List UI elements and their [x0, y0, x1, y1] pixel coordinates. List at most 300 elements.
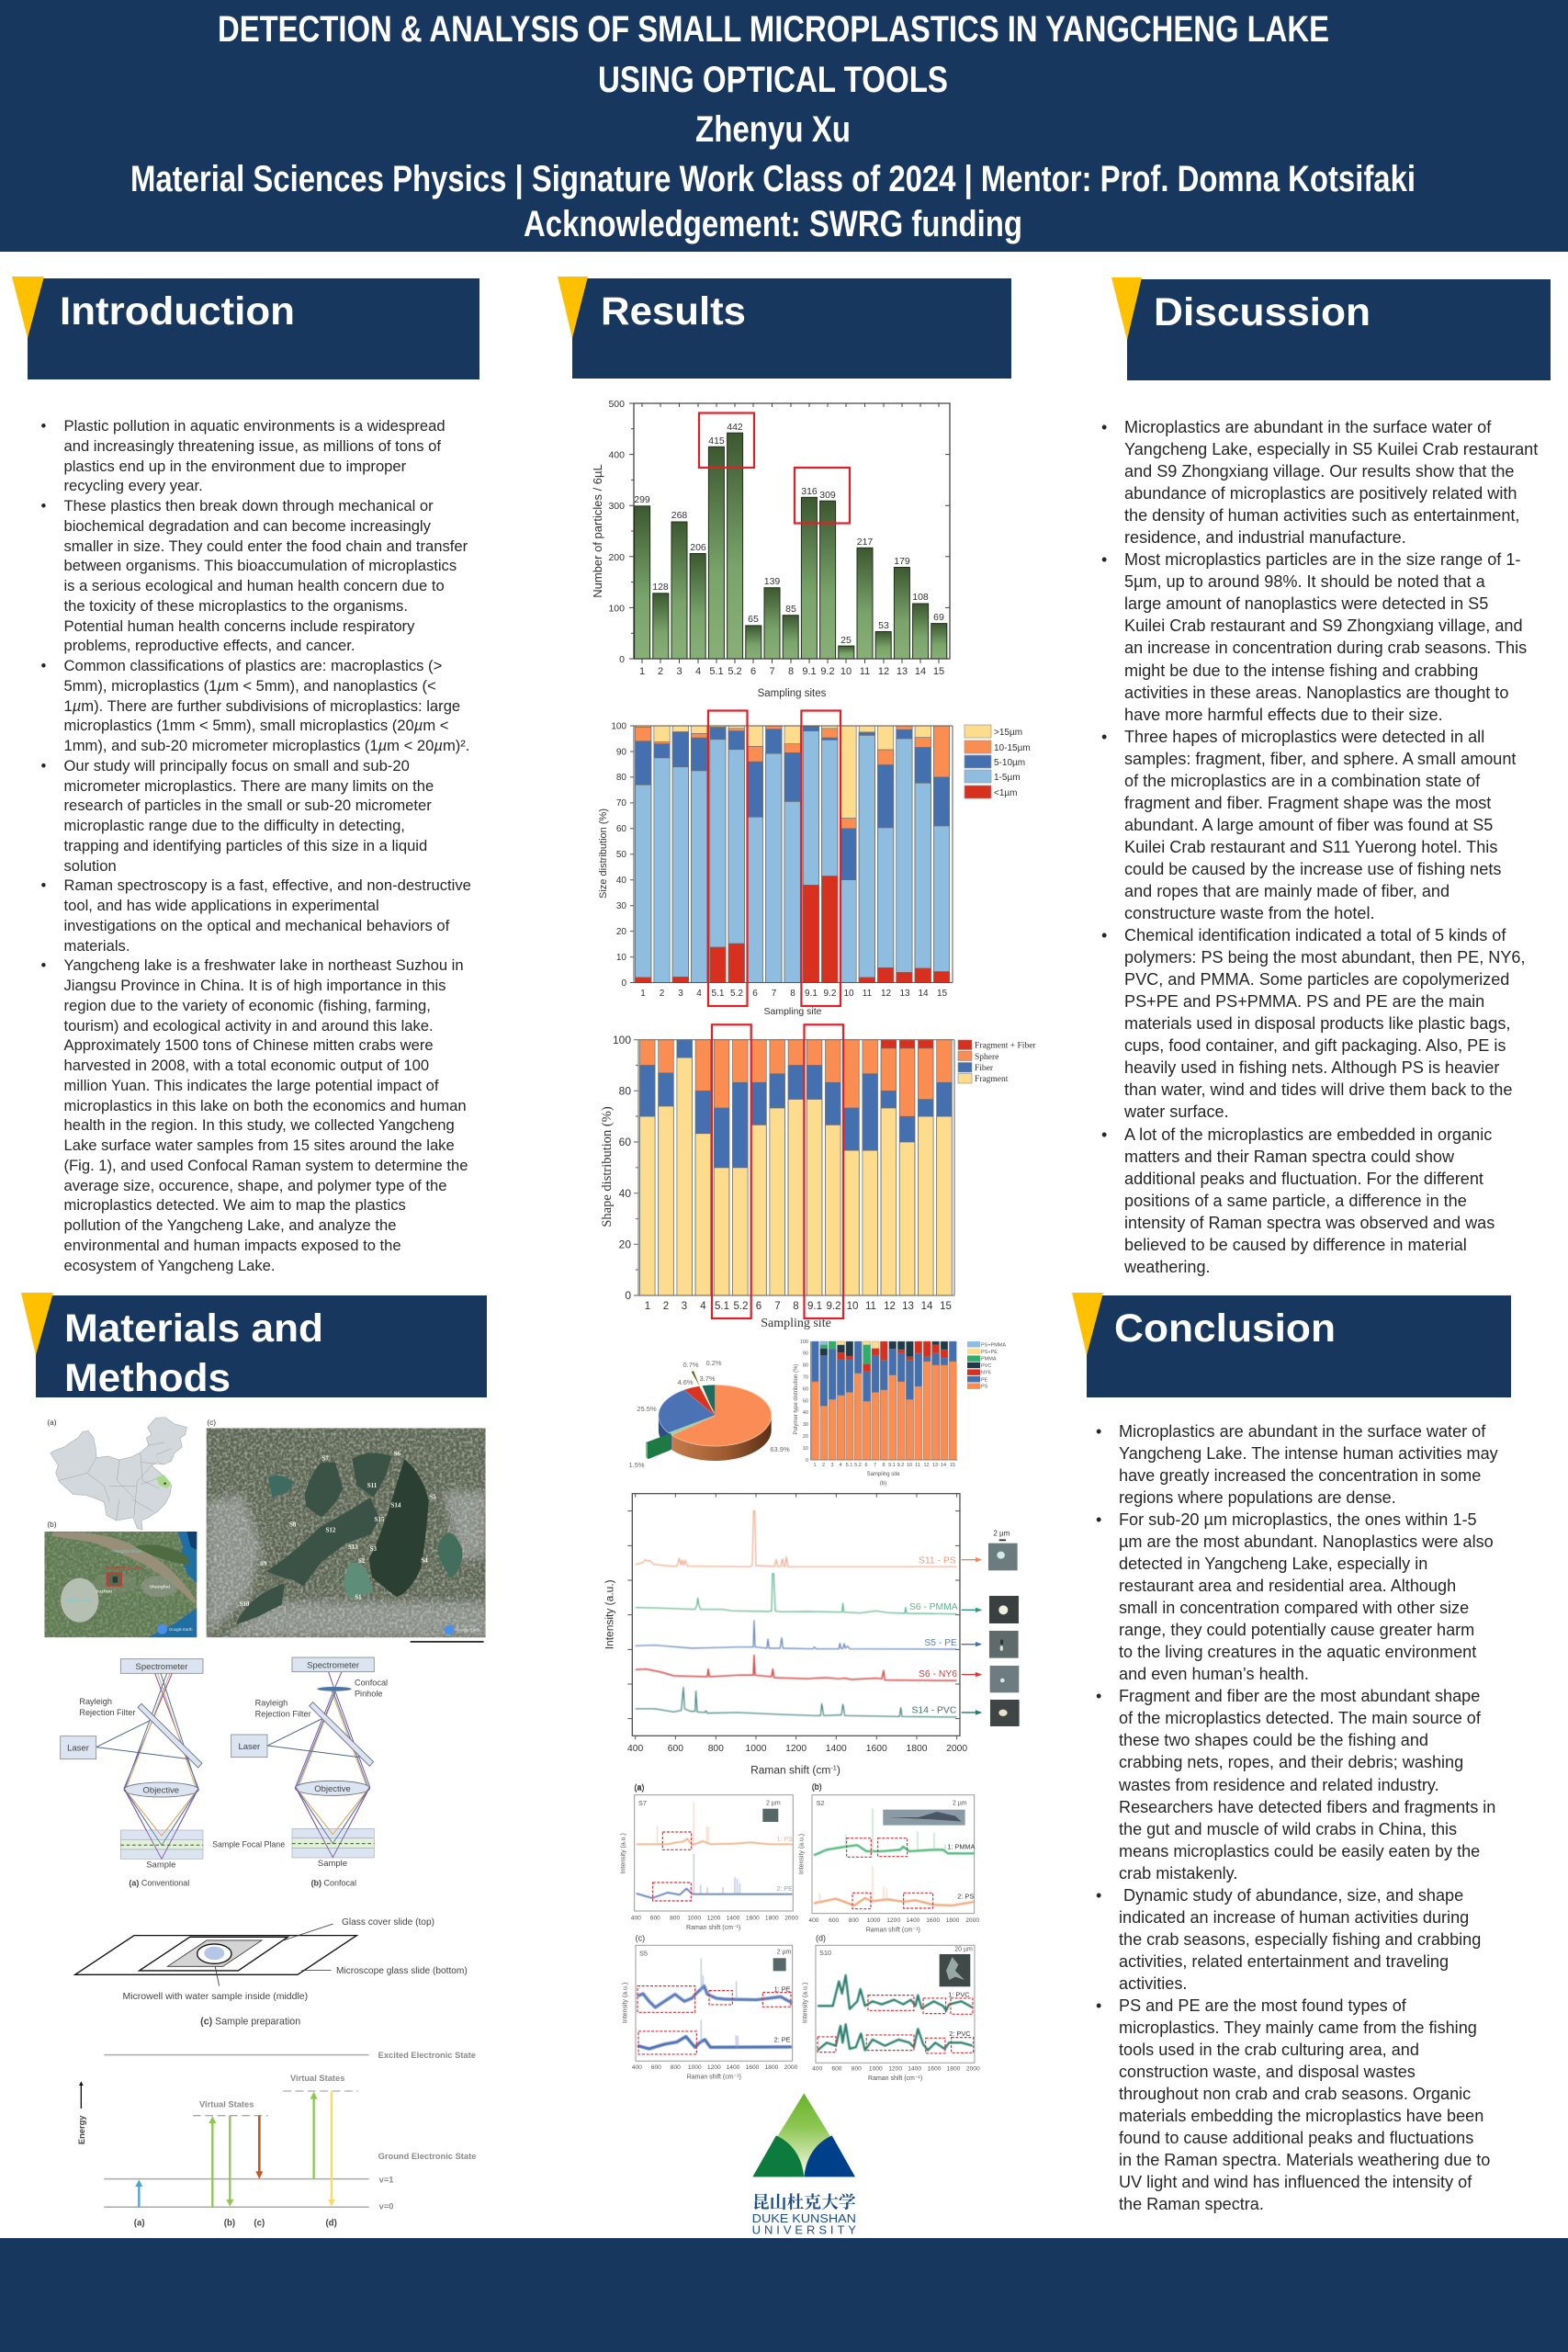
line chart: Raman spectra of polymers: Raman shift (cm	[750, 1764, 830, 1777]
stacked bar chart: size distribution: 50	[616, 850, 626, 860]
stacked bar chart: polymer type distribution: 50	[803, 1398, 808, 1404]
panel b: S2: 2: PS	[957, 1893, 974, 1901]
stacked bar chart: shape distribution: 40	[619, 1187, 631, 1200]
footer band	[0, 2238, 1568, 2352]
setup a: conventional	[61, 1659, 203, 1888]
text: introduction: region due to the variety of economic (fishing, farming,	[64, 997, 431, 1014]
map c: Yangcheng Lake sampling sites: Google Earth	[457, 1627, 480, 1632]
bar chart: number of particles per site: 217	[857, 537, 873, 548]
stacked bar chart: shape distribution: 15	[940, 1301, 952, 1312]
label: map b: (b)	[47, 1520, 57, 1529]
spectra panels a to d: 1800	[765, 1915, 779, 1921]
stacked bar chart: size distribution: 5.2	[730, 989, 743, 999]
stacked bar chart: polymer type distribution: 20	[803, 1434, 808, 1440]
legend: polymer types: PS+PE	[981, 1350, 998, 1355]
bar chart: number of particles per site: 200	[608, 552, 625, 563]
spectra panels a to d: 400	[632, 2064, 642, 2071]
map c: Yangcheng Lake sampling sites: S15	[375, 1516, 385, 1523]
setup a: conventional: Rayleigh	[79, 1697, 112, 1706]
text: discussion: heavily used in fishing nets. Although PS is heavier	[1124, 1058, 1499, 1077]
bar chart: number of particles per site: 69	[933, 612, 944, 623]
text: conclusion: Fragment and fiber are the most abundant shape	[1119, 1687, 1480, 1705]
heading: Results: Results	[601, 289, 746, 334]
spectra panels a to d: Intensity (a.u.)	[798, 1834, 805, 1874]
text: discussion: an increase in concentration during crab seasons. This	[1124, 639, 1527, 657]
legend: polymer types: PS	[981, 1385, 988, 1390]
bar chart: number of particles per site: 400	[608, 450, 625, 461]
text: conclusion: the crab seasons, especially fishing and crabbing	[1119, 1930, 1481, 1949]
pie chart: polymer share: 1.5%	[628, 1461, 645, 1469]
panel a: S7: 1: PS	[777, 1837, 793, 1843]
text: conclusion: activities, related entertainment and traveling	[1119, 1952, 1449, 1971]
spectra panels a to d: 1000	[869, 2066, 883, 2073]
text: introduction: microplastics detected. We aim to map the plastics	[64, 1196, 406, 1214]
text: discussion: positions of a same particle, a difference in the	[1124, 1192, 1467, 1210]
spectra panels a to d: 800	[671, 2064, 681, 2071]
line chart: Raman spectra of polymers: S6 - NY6	[919, 1669, 957, 1679]
text: discussion: constructure waste from the hotel.	[1124, 904, 1375, 922]
text: introduction: is a serious ecological and human health concern due to	[64, 577, 445, 594]
figure: location maps	[44, 1418, 487, 1642]
stacked bar chart: polymer type distribution: 100	[800, 1340, 808, 1345]
stacked bar chart: shape distribution: 7	[774, 1301, 781, 1312]
diagram: Raman energy levels: v=1	[379, 2176, 393, 2185]
text: introduction: problems, reproductive effects, and cancer.	[64, 637, 355, 654]
map c: Yangcheng Lake sampling sites: S12	[326, 1526, 336, 1533]
text: conclusion: to the living creatures in the aquatic environment	[1119, 1643, 1476, 1661]
bar chart: number of particles per site: 500	[608, 399, 625, 410]
spectra panels a to d: Raman shift (cm⁻¹)	[687, 2074, 741, 2080]
map c: Yangcheng Lake sampling sites: S5	[429, 1493, 436, 1500]
pie chart: polymer share: 0.2%	[705, 1359, 722, 1367]
stacked bar chart: size distribution: 6	[752, 989, 758, 999]
line chart: Raman spectra of polymers: S11 - PS	[919, 1555, 956, 1566]
setup a: conventional: Rejection Filter	[79, 1708, 135, 1717]
stacked bar chart: shape distribution: 5.1	[715, 1301, 729, 1312]
stacked bar chart: polymer type distribution: 4	[839, 1463, 842, 1468]
setup a: conventional: Sample	[146, 1860, 175, 1871]
map c: Yangcheng Lake sampling sites: S10	[240, 1600, 250, 1608]
text: discussion: Three hapes of microplastics were detected in all	[1124, 728, 1484, 746]
map c: Yangcheng Lake sampling sites: S1	[355, 1593, 362, 1600]
legend: size classes	[964, 725, 1031, 798]
arrow: energy axis: Energy	[77, 2115, 86, 2144]
bar chart: number of particles per site: 0	[619, 654, 625, 665]
legend: polymer types: PS+PMMA	[981, 1343, 1006, 1349]
spectra panels a to d: 1000	[867, 1917, 881, 1924]
bar chart: number of particles per site: 9.1	[802, 666, 817, 677]
legend: size classes: 1-5µm	[994, 773, 1021, 783]
text: conclusion: wastes from residence and related industry.	[1119, 1775, 1439, 1793]
panel d: S10: S10	[819, 1949, 831, 1957]
text: conclusion: indicated an increase of human activities during	[1119, 1908, 1469, 1927]
stacked bar chart: shape distribution: 2	[663, 1301, 669, 1312]
text: conclusion: activities.	[1119, 1974, 1187, 1993]
text: conclusion: and even human’s health.	[1119, 1665, 1309, 1683]
spectra panels a to d: (d)	[816, 1934, 826, 1943]
setup b: confocal: Pinhole	[355, 1689, 383, 1698]
diagram: sample preparation slide: Microwell with water sample inside (middle)	[123, 1992, 308, 2002]
arrow: energy axis	[77, 2081, 86, 2144]
text: conclusion: tools used in the crab culturing area, and	[1119, 2041, 1419, 2059]
text: discussion: intensity of Raman spectra was observed and was	[1124, 1214, 1495, 1232]
stacked bar chart: size distribution: 30	[616, 901, 626, 911]
map b: Yangtze delta satellite view: Yangcheng Lake	[106, 1566, 142, 1571]
heading: Materials and Methods: Methods	[64, 1356, 231, 1400]
map b: Yangtze delta satellite view: Yangtze River	[113, 1549, 142, 1555]
bar chart: number of particles per site: 1	[639, 666, 645, 677]
text: introduction: microplastics in this lake on both the economics and human	[64, 1097, 467, 1114]
stacked bar chart: shape distribution: 4	[700, 1301, 706, 1312]
bar chart: number of particles per site: 5.1	[709, 666, 724, 677]
panel a: S7: 2: PE	[777, 1886, 793, 1893]
stacked bar chart: size distribution: Sampling site	[763, 1006, 822, 1017]
spectra panels a to d: Intensity (a.u.)	[802, 1983, 808, 2023]
setup b: confocal	[231, 1657, 388, 1888]
setup b: confocal: Confocal	[355, 1678, 388, 1687]
diagram: Raman energy levels: (c)	[254, 2218, 265, 2228]
bar chart: number of particles per site: 179	[894, 556, 910, 567]
text: introduction: microplastic range due to the difficulty in detecting,	[64, 817, 405, 834]
diagram: Raman energy levels: v=0	[379, 2202, 393, 2211]
heading: Discussion: Discussion	[1154, 290, 1371, 334]
line chart: Raman spectra of polymers: 2000	[946, 1744, 967, 1754]
stacked bar chart: shape distribution: 3	[682, 1301, 687, 1312]
panel d: S10: 2: PVC	[949, 2030, 971, 2038]
text: introduction: materials.	[64, 937, 130, 954]
bar chart: number of particles per site: 14	[915, 666, 926, 677]
bar chart: number of particles per site: 8	[788, 666, 794, 677]
diagram: sample preparation slide: Glass cover slide (top)	[342, 1917, 434, 1928]
stacked bar chart: shape distribution: 20	[619, 1238, 631, 1251]
particle micrographs: 2 µm	[993, 1530, 1010, 1538]
map c: Yangcheng Lake sampling sites: S13	[348, 1544, 358, 1551]
heading: Results	[558, 277, 1011, 379]
text: conclusion: in the Raman spectra. Materials weathering due to	[1119, 2151, 1490, 2169]
stacked bar chart: polymer type distribution: 80	[803, 1363, 808, 1369]
stacked bar chart: size distribution: 8	[790, 989, 795, 999]
map b: Yangtze delta satellite view: Shanghai	[150, 1585, 171, 1590]
text: discussion: Kuilei Crab restaurant and S9 Zhongxiang village, and	[1124, 616, 1523, 635]
text: discussion: weathering.	[1124, 1258, 1211, 1276]
spectra panels a to d: 1800	[946, 1917, 960, 1924]
text: discussion: PS+PE and PS+PMMA. PS and PE are the main	[1124, 992, 1484, 1011]
text: conclusion: construction waste, and disposal wastes	[1119, 2063, 1416, 2081]
text: conclusion: throughout non crab and crab seasons. Organic	[1119, 2085, 1471, 2103]
label: sample focal plane: Sample Focal Plane	[212, 1839, 285, 1849]
logo: Duke Kunshan University: DUKE KUNSHAN	[752, 2211, 856, 2225]
text: discussion: additional peaks and fluctuation. For the different	[1124, 1170, 1483, 1188]
particle micrographs	[988, 1530, 1020, 1726]
spectra panels a to d: 1600	[746, 1915, 760, 1921]
panel c: S5: 1: PE	[774, 1984, 791, 1993]
map c: Yangcheng Lake sampling sites: S9	[260, 1560, 267, 1567]
panel c: S5: 2: PE	[774, 2036, 791, 2044]
stacked bar chart: size distribution: 1	[640, 989, 646, 999]
text: introduction: Yangcheng lake is a freshwater lake in northeast Suzhou in	[64, 956, 464, 974]
heading: Conclusion: Conclusion	[1114, 1306, 1336, 1351]
stacked bar chart: size distribution: 80	[616, 773, 626, 783]
line chart: Raman spectra of polymers: 1200	[785, 1744, 807, 1754]
stacked bar chart: size distribution: 3	[678, 989, 683, 999]
text: conclusion: means microplastics could be easily eaten by the	[1119, 1842, 1480, 1860]
setup a: conventional: Laser	[67, 1744, 89, 1754]
text: introduction: tool, and has wide applications in experimental	[64, 897, 379, 914]
spectra panels a to d: 1600	[926, 1917, 940, 1924]
stacked bar chart: size distribution: 13	[899, 989, 910, 999]
legend: polymer types	[967, 1341, 1006, 1390]
spectra panels a to d: 2000	[784, 1915, 798, 1921]
bar chart: number of particles per site: 10	[840, 666, 852, 677]
logo: Duke Kunshan University: 昆山杜克大学	[752, 2189, 856, 2213]
panel b: S2: 2 µm	[953, 1801, 967, 1807]
bar chart: number of particles per site: 12	[878, 666, 889, 677]
panel c: S5	[636, 1945, 793, 2061]
bar chart: number of particles per site	[591, 399, 950, 699]
text: conclusion	[1097, 1422, 1498, 2213]
text: introduction: between organisms. This bioaccumulation of microplastics	[64, 557, 457, 574]
text: discussion: Yangcheng Lake, especially in S5 Kuilei Crab restaurant	[1124, 440, 1538, 458]
text: discussion: water surface.	[1124, 1102, 1229, 1121]
stacked bar chart: polymer type distribution: Polymer type distribution (%)	[794, 1364, 799, 1434]
text: introduction: environmental and human impacts exposed to the	[64, 1237, 401, 1254]
stacked bar chart: size distribution: 60	[616, 824, 626, 834]
text: conclusion: materials embedding the microplastics have been	[1119, 2107, 1483, 2125]
stacked bar chart: polymer type distribution: 70	[803, 1374, 808, 1380]
bar chart: number of particles per site: 11	[860, 666, 870, 677]
text: conclusion: have greatly increased the concentration in some	[1119, 1466, 1481, 1485]
stacked bar chart: polymer type distribution: (b)	[880, 1481, 886, 1487]
line chart: Raman spectra of polymers: Intensity (a.u.)	[604, 1579, 616, 1649]
text: conclusion: restaurant area and residential area. Although	[1119, 1577, 1456, 1595]
bar chart: number of particles per site: 65	[748, 614, 759, 625]
text: discussion: of the microplastics are in a combination state of	[1124, 772, 1480, 790]
stacked bar chart: size distribution: 40	[616, 876, 626, 886]
spectra panels a to d: 600	[651, 2064, 661, 2071]
line chart: Raman spectra of polymers	[604, 1494, 1020, 1792]
spectra panels a to d: 1200	[886, 1917, 900, 1924]
spectra panels a to d: 1200	[888, 2066, 902, 2073]
diagram: Raman energy levels: (d)	[325, 2218, 337, 2228]
stacked bar chart: shape distribution: 13	[902, 1301, 914, 1312]
map a: China	[47, 1418, 186, 1530]
map c: Yangcheng Lake sampling sites: S4	[421, 1556, 428, 1564]
text: discussion: have more harmful effects due to their size.	[1124, 706, 1443, 724]
bar chart: number of particles per site: Sampling sites	[758, 688, 827, 699]
spectra panels a to d: Intensity (a.u.)	[622, 1983, 628, 2023]
bar chart: number of particles per site: 206	[690, 542, 706, 553]
text: conclusion: PS and PE are the most found types of	[1119, 1996, 1406, 2015]
diagram: sample preparation slide	[75, 1917, 468, 2002]
stacked bar chart: shape distribution: 1	[645, 1301, 650, 1312]
text: discussion: A lot of the microplastics are embedded in organic	[1124, 1125, 1492, 1143]
text: discussion: large amount of nanoplastics were detected in S5	[1124, 594, 1488, 613]
stacked bar chart: polymer type distribution: 13	[932, 1463, 938, 1468]
panel b: S2: 1: PMMA	[947, 1843, 976, 1851]
map c: Yangcheng Lake sampling sites: S11	[367, 1482, 378, 1489]
text: introduction: plastics end up in the environment due to improper	[64, 458, 406, 474]
stacked bar chart: polymer type distribution: 0	[806, 1458, 808, 1464]
line chart: Raman spectra of polymers: 1600	[866, 1744, 887, 1754]
setup b: confocal: Rejection Filter	[255, 1710, 311, 1719]
pie chart: polymer share: 25.5%	[637, 1405, 657, 1413]
panel c: S5: 2 µm	[777, 1950, 791, 1956]
map b: Yangtze delta satellite view: Google Earth	[169, 1627, 193, 1632]
text: discussion: believed to be caused by difference in material	[1124, 1236, 1467, 1254]
heading: Discussion	[1111, 277, 1551, 380]
author: Zhenyu Xu	[695, 109, 851, 150]
stacked bar chart: size distribution: 20	[616, 927, 626, 937]
spectra panels a to d: 1400	[907, 1917, 920, 1924]
line chart: Raman spectra of polymers: S6 - PMMA	[909, 1602, 958, 1612]
map c: Yangcheng Lake sampling sites: S7	[322, 1455, 329, 1463]
stacked bar chart: shape distribution: 14	[921, 1301, 933, 1312]
text: conclusion: of the microplastics detected. The main source of	[1119, 1709, 1481, 1727]
text: discussion: Microplastics are abundant in the surface water of	[1124, 418, 1491, 436]
text: introduction: biochemical degradation and can become increasingly	[64, 517, 431, 535]
spectra panels a to d: 1200	[707, 2064, 721, 2071]
text: introduction: million Yuan. This indicates the large potential impact of	[64, 1077, 439, 1094]
text: introduction: ecosystem of Yangcheng Lake.	[64, 1257, 276, 1273]
poster title line 2: USING OPTICAL TOOLS	[598, 60, 948, 100]
map c: Yangcheng Lake sampling sites: S8	[289, 1521, 297, 1528]
spectra panels a to d	[621, 1782, 980, 2082]
text: introduction: 5mm), microplastics (1µm < 5mm), and nanoplastics (<	[64, 677, 436, 695]
text: discussion: Kuilei Crab restaurant and S11 Yuerong hotel. This	[1124, 838, 1497, 856]
stacked bar chart: shape distribution: 11	[865, 1301, 876, 1312]
bar chart: number of particles per site: 268	[671, 510, 687, 521]
text: introduction: Potential human health concerns include respiratory	[64, 617, 414, 634]
bar chart: number of particles per site: 415	[708, 435, 725, 447]
stacked bar chart: polymer type distribution: 7	[874, 1463, 876, 1468]
text: conclusion: Yangcheng Lake. The intense human activities may	[1119, 1444, 1498, 1463]
spectra panels a to d: 800	[670, 1915, 681, 1921]
pie chart: polymer share: 63.9%	[770, 1445, 790, 1453]
stacked bar chart: size distribution: 15	[937, 989, 947, 999]
text: conclusion: the Raman spectra.	[1119, 2195, 1264, 2213]
legend: polymer types: NY6	[981, 1371, 991, 1376]
text: conclusion: microplastics. They mainly came from the fishing	[1119, 2018, 1477, 2037]
diagram: Raman energy levels: Virtual States	[290, 2074, 344, 2083]
arrows: transitions	[135, 2091, 335, 2207]
bar chart: number of particles per site: 25	[840, 635, 852, 646]
text: conclusion: these two shapes could be the fishing and	[1119, 1731, 1428, 1749]
text: conclusion: Researchers have detected fibers and fragments in	[1119, 1798, 1495, 1816]
panel a: S7: S7	[638, 1799, 647, 1807]
text: introduction: Our study will principally focus on small and sub-20	[64, 757, 410, 775]
map c: Yangcheng Lake sampling sites: (c)	[207, 1418, 216, 1427]
panel c: S5: S5	[639, 1950, 648, 1958]
stacked bar chart: size distribution: Size distribution (%)	[598, 808, 609, 899]
bar chart: number of particles per site: 316	[801, 486, 818, 497]
diagram: Raman energy levels: Excited Electronic State	[378, 2051, 476, 2060]
stacked bar chart: size distribution: 2	[660, 989, 665, 999]
spectra panels a to d: Raman shift (cm⁻¹)	[866, 1928, 920, 1934]
legend: size classes: >15µm	[994, 728, 1022, 738]
diagram: Raman energy levels: Virtual States	[199, 2099, 254, 2109]
text: conclusion: Microplastics are abundant in the surface water of	[1119, 1422, 1485, 1441]
line chart: Raman spectra of polymers: )	[837, 1764, 840, 1777]
stacked bar chart: polymer type distribution: Sampling site	[867, 1472, 900, 1477]
text: discussion: could be caused by the increase use of fishing nets	[1124, 860, 1501, 878]
stacked bar chart: shape distribution: 100	[613, 1034, 631, 1046]
text: conclusion: UV light and wind has influenced the intensity of	[1119, 2173, 1472, 2191]
stacked bar chart: polymer type distribution	[794, 1340, 1006, 1487]
stacked bar chart: polymer type distribution: 9.2	[897, 1463, 904, 1468]
text: introduction: investigations on the optical and mechanical behaviors of	[64, 917, 449, 934]
bar chart: number of particles per site: 3	[676, 666, 682, 677]
text: introduction: harvested in 2008, with a total economic output of 100	[64, 1057, 429, 1074]
stacked bar chart: polymer type distribution: 6	[864, 1463, 868, 1468]
text: discussion: Chemical identification indicated a total of 5 kinds of	[1124, 926, 1506, 944]
map c: Yangcheng Lake sampling sites: S14	[391, 1502, 401, 1510]
legend: shapes	[958, 1040, 1036, 1084]
bar chart: number of particles per site: 128	[652, 582, 669, 593]
bar chart: number of particles per site: 2	[658, 666, 663, 677]
heading: Conclusion	[1072, 1293, 1511, 1397]
text: discussion: 5µm, up to around 98%. It should be noted that a	[1124, 572, 1485, 591]
pie chart: polymer share	[628, 1359, 790, 1469]
bar chart: number of particles per site: 5.2	[728, 666, 742, 677]
spectra panels a to d: 1400	[727, 2064, 740, 2071]
diagram: sample preparation slide: Microscope glass slide (bottom)	[336, 1966, 468, 1976]
text: conclusion: µm are the most abundant. Nanoplastics were also	[1119, 1532, 1494, 1551]
spectra panels a to d: Raman shift (cm⁻¹)	[686, 1925, 740, 1931]
arrows to particle micrographs	[962, 1557, 982, 1715]
stacked bar chart: polymer type distribution: 3	[830, 1463, 834, 1468]
setup a: conventional: (a) Conventional	[129, 1879, 189, 1888]
spectra panels a to d: 1600	[746, 2064, 760, 2071]
text: discussion: cups, food container, and gift packaging. Also, PE is	[1124, 1036, 1506, 1055]
bar chart: number of particles per site: 442	[727, 422, 743, 433]
spectra panels a to d: 2000	[965, 1917, 979, 1924]
legend: polymer types: PMMA	[981, 1357, 997, 1363]
stacked bar chart: shape distribution: 10	[847, 1301, 858, 1312]
stacked bar chart: shape distribution: 0	[625, 1289, 631, 1302]
stacked bar chart: size distribution: 70	[616, 798, 626, 808]
diagram: Raman energy levels: (c) Sample preparation	[200, 2016, 300, 2027]
legend: polymer types: PE	[981, 1377, 988, 1383]
logo: Duke Kunshan University: UNIVERSITY	[752, 2223, 856, 2237]
legend: size classes: 5-10µm	[994, 758, 1025, 768]
stacked bar chart: size distribution: 0	[621, 978, 626, 989]
stacked bar chart: polymer type distribution: 5.2	[854, 1463, 862, 1468]
stacked bar chart: shape distribution: 8	[793, 1301, 799, 1312]
legend: size classes: 10-15µm	[994, 743, 1031, 753]
spectra panels a to d: 1400	[727, 1915, 740, 1921]
text: introduction: Approximately 1500 tons of Chinese mitten crabs were	[64, 1036, 434, 1054]
stacked bar chart: polymer type distribution: 9.1	[888, 1463, 896, 1468]
spectra panels a to d: 2000	[966, 2066, 980, 2073]
stacked bar chart: size distribution: 5.1	[712, 989, 725, 999]
header banner	[0, 0, 1568, 252]
text: introduction: trapping and identifying particles of this size in a liquid	[64, 837, 427, 854]
stacked bar chart: polymer type distribution: 60	[803, 1387, 808, 1393]
acknowledgement: Acknowledgement: SWRG funding	[524, 204, 1022, 244]
map c: Yangcheng Lake sampling sites: S6	[394, 1450, 400, 1457]
pie chart: polymer share: 0.7%	[682, 1361, 699, 1369]
text: discussion: matters and their Raman spectra could show	[1124, 1148, 1454, 1166]
heading: Introduction	[12, 277, 479, 379]
text: conclusion: the gut and muscle of wild crabs in China, this	[1119, 1820, 1457, 1838]
map b: Yangtze delta satellite view	[44, 1532, 197, 1637]
text: discussion: and ropes that are mainly made of fiber, and	[1124, 882, 1450, 900]
stacked bar chart: polymer type distribution: 30	[803, 1422, 808, 1428]
line chart: Raman spectra of polymers: 600	[668, 1744, 683, 1754]
spectra panels a to d: 800	[849, 1917, 859, 1924]
text: introduction: solution	[64, 856, 117, 875]
stacked bar chart: size distribution: 10	[843, 989, 854, 999]
